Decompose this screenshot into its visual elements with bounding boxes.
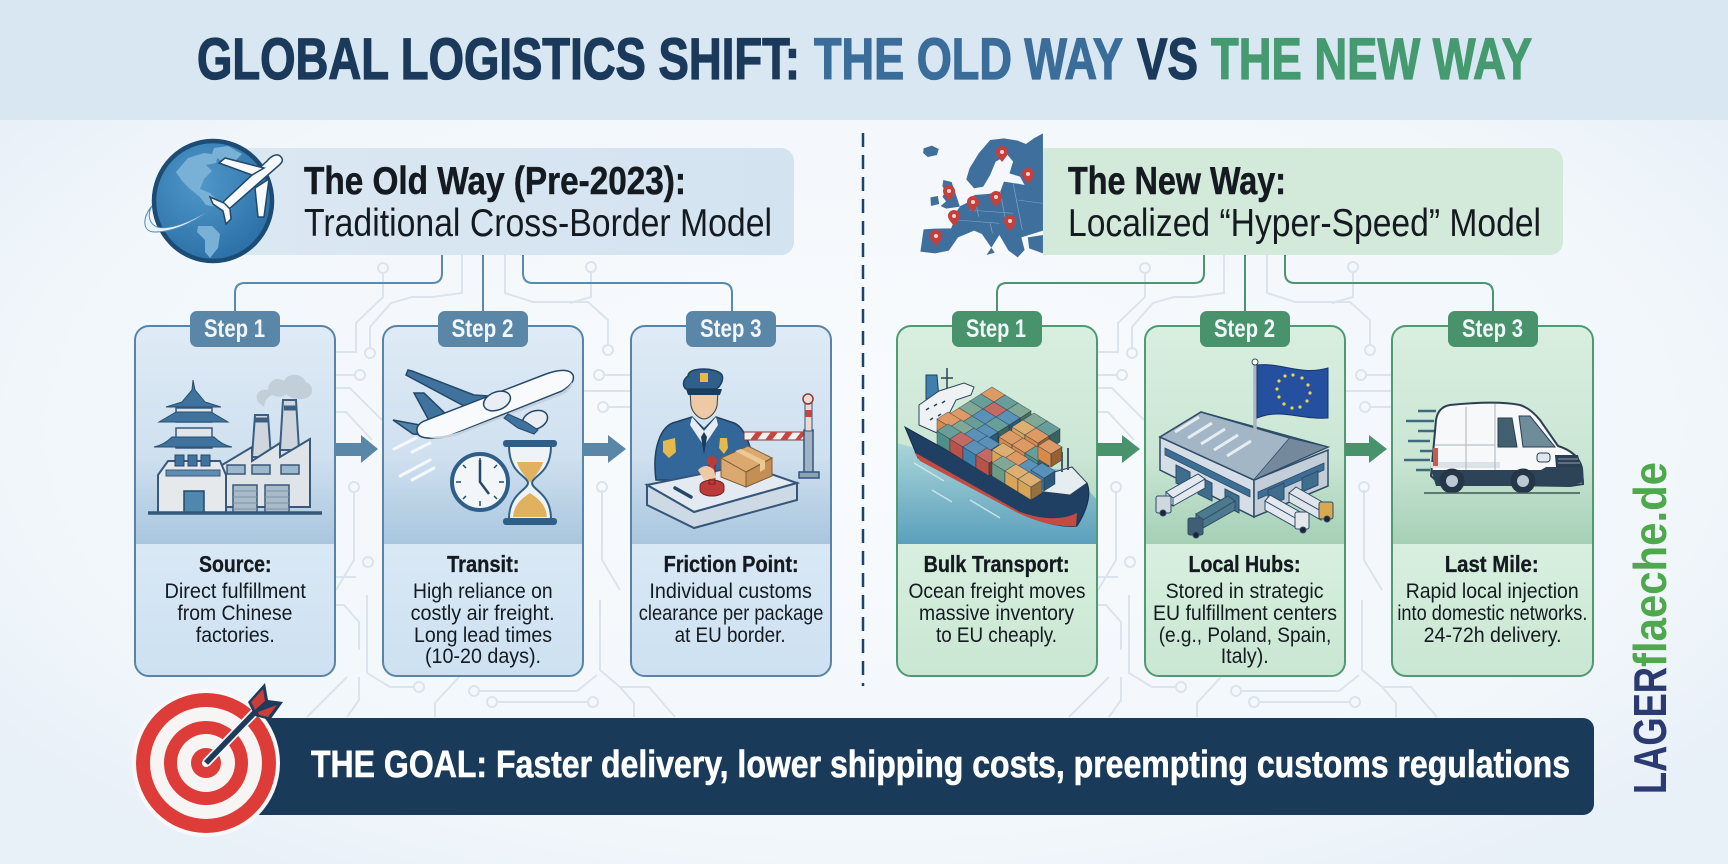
step text: Friction Point: (664, 551, 799, 577)
step badge (952, 311, 1042, 347)
step text: 24-72h delivery. (1424, 624, 1562, 647)
step text: Individual customs (649, 580, 812, 603)
step text: (e.g., Poland, Spain, (1159, 624, 1331, 647)
step text: costly air freight. (411, 602, 555, 625)
step text: EU fulfillment centers (1153, 602, 1337, 625)
step text: Rapid local injection (1406, 580, 1579, 603)
step text: to EU cheaply. (936, 624, 1057, 647)
step text: Bulk Transport: (924, 551, 1070, 577)
red stamp (700, 460, 724, 496)
old way header pill: The Old Way (Pre-2023): (304, 160, 686, 203)
step badge: Step 1 (966, 315, 1026, 343)
step text: Source: (199, 551, 272, 577)
new way header pill (1043, 148, 1563, 255)
arrow: new 1 to 2 (1097, 435, 1140, 463)
panel: new way (897, 133, 1593, 676)
panel: old way (135, 141, 831, 676)
icon: pagoda and factory (148, 375, 322, 513)
step badge: Step 2 (1214, 315, 1275, 343)
brand: LAGERflaeche.de (1624, 462, 1676, 794)
card: old step 1 (135, 311, 335, 676)
icon: clock and hourglass (452, 440, 557, 525)
arrow: old 2 to 3 (583, 435, 626, 463)
card: new step 3 (1392, 311, 1593, 676)
step badge: Step 1 (204, 315, 265, 343)
step badge: Step 2 (452, 315, 514, 343)
step text: Transit: (447, 551, 520, 577)
step text: Local Hubs: (1188, 551, 1300, 577)
title: THE OLD WAY (814, 27, 1123, 92)
connectors (235, 255, 732, 311)
new way header pill: Localized “Hyper-Speed” Model (1068, 202, 1541, 245)
step text: Italy). (1221, 645, 1269, 668)
brand: LAGERflaeche.de: flaeche.de (1624, 462, 1676, 667)
title (197, 27, 1532, 92)
parcel (721, 446, 772, 487)
icon: airplane (393, 370, 573, 480)
step text: Stored in strategic (1166, 580, 1324, 603)
trucks (1156, 474, 1333, 538)
step text: Ocean freight moves (908, 580, 1086, 603)
step text: into domestic networks. (1397, 602, 1587, 625)
step text (1397, 551, 1587, 647)
card: new step 1 (897, 311, 1097, 676)
old way header pill: Traditional Cross-Border Model (304, 202, 772, 245)
icon: warehouse (1156, 359, 1333, 538)
step text: at EU border. (675, 624, 786, 647)
card: new step 2 (1145, 311, 1345, 676)
old way header pill (215, 148, 794, 255)
icon: customs officer (647, 369, 819, 528)
step text (411, 551, 555, 668)
step badge (1448, 311, 1538, 347)
step text: clearance per package (639, 602, 823, 625)
desk (647, 465, 797, 512)
step badge (190, 311, 280, 347)
section divider (862, 133, 864, 686)
step badge (1200, 311, 1290, 347)
step text: (10-20 days). (425, 645, 541, 668)
step badge (686, 311, 776, 347)
icon: target with arrow (132, 683, 283, 837)
step text: massive inventory (919, 602, 1074, 625)
barrier (744, 432, 805, 440)
connectors (997, 255, 1493, 311)
title: THE NEW WAY (1211, 27, 1532, 92)
brand: LAGERflaeche.de: LAGER (1624, 667, 1676, 794)
step text: factories. (196, 624, 275, 647)
step text: from Chinese (177, 602, 292, 625)
step text (1153, 551, 1337, 668)
step badge: Step 3 (1462, 315, 1523, 343)
cargo containers (937, 387, 1062, 500)
title band (0, 0, 1728, 120)
step text (908, 551, 1086, 647)
step text: Direct fulfillment (164, 580, 306, 603)
icon: europe map with pins (920, 133, 1043, 257)
step badge: Step 3 (700, 315, 762, 343)
arrow: new 2 to 3 (1345, 435, 1387, 463)
step text (164, 551, 306, 647)
card: old step 3 (631, 311, 831, 676)
step text (639, 551, 823, 647)
icon: container ship (897, 368, 1097, 544)
arrow: old 1 to 2 (335, 435, 378, 463)
title: GLOBAL LOGISTICS SHIFT: (197, 27, 800, 92)
goal banner (255, 718, 1594, 815)
new way header pill: The New Way: (1068, 160, 1286, 203)
card: old step 2 (383, 311, 583, 676)
step text: Last Mile: (1445, 551, 1539, 577)
title: VS (1137, 27, 1198, 92)
step text: Long lead times (414, 624, 552, 647)
step badge (438, 311, 528, 347)
EU flag (1252, 359, 1328, 437)
icon: globe with plane (145, 141, 282, 261)
icon: delivery van (1404, 403, 1584, 494)
step text: High reliance on (413, 580, 553, 603)
